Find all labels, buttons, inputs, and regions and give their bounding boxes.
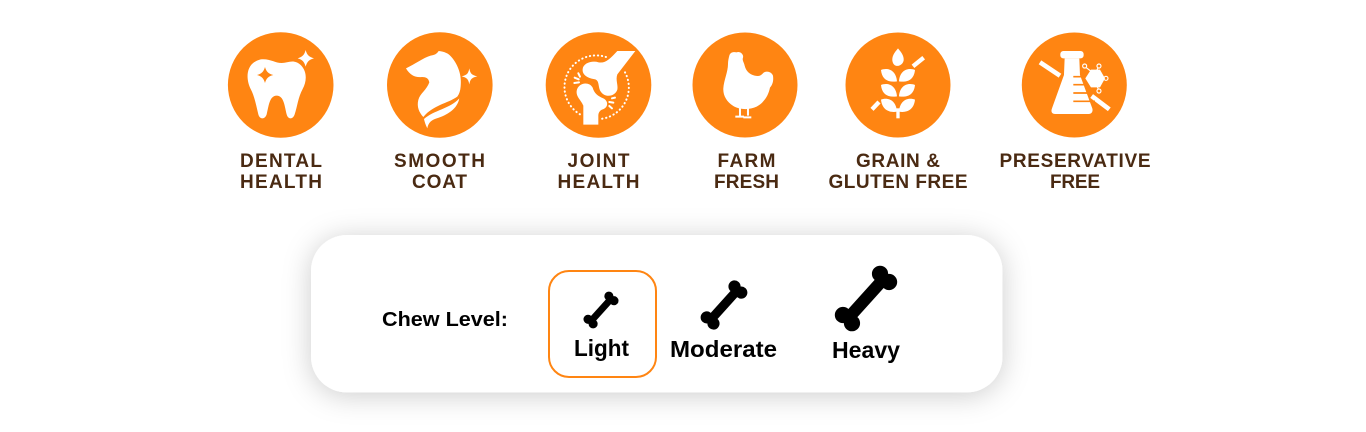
- benefit: dental health: [228, 32, 334, 193]
- label: moderate: Moderate: [670, 336, 777, 362]
- label: preservative free: [1000, 151, 1150, 193]
- label: heavy: Heavy: [832, 337, 900, 363]
- benefit: preservative free: [1000, 32, 1150, 193]
- label: farm fresh: FARM: [718, 151, 776, 172]
- selected option: light: [549, 271, 656, 377]
- option: moderate: [670, 278, 777, 362]
- label: smooth coat: SMOOTH: [394, 151, 485, 172]
- icon: heavy bone: [831, 262, 901, 335]
- benefit: smooth coat: [387, 32, 493, 193]
- label: joint health: [558, 151, 640, 193]
- icon: crossed-out wheat: [846, 32, 950, 138]
- label: smooth coat: COAT: [412, 172, 467, 193]
- heading: chew level: Chew Level:: [382, 308, 508, 331]
- icon: crossed-out flask: [1022, 32, 1127, 138]
- label: dental health: DENTAL: [240, 151, 322, 172]
- icon: chicken: [692, 32, 798, 138]
- benefit: grain and gluten free: [828, 32, 968, 193]
- label: grain and gluten free: [828, 151, 968, 193]
- label: preservative free: PRESERVATIVE: [1000, 151, 1150, 172]
- label: joint health: HEALTH: [558, 172, 640, 193]
- option: heavy: [831, 262, 901, 363]
- icon: dog with shiny coat: [387, 32, 493, 138]
- label: grain and gluten free: GLUTEN FREE: [828, 172, 968, 193]
- label: grain and gluten free: GRAIN &: [856, 151, 940, 172]
- benefit: joint health: [546, 32, 651, 193]
- label: joint health: JOINT: [568, 151, 630, 172]
- benefit: farm fresh: [692, 32, 798, 193]
- panel: chew level: [311, 235, 1002, 392]
- label: dental health: [240, 151, 322, 193]
- label: farm fresh: [714, 151, 779, 193]
- label: dental health: HEALTH: [240, 172, 322, 193]
- label: smooth coat: [394, 151, 485, 193]
- icon: knee joint: [546, 32, 651, 138]
- label: light: Light: [574, 335, 629, 361]
- label: preservative free: FREE: [1050, 172, 1100, 193]
- icon: moderate bone: [698, 278, 750, 332]
- icon: light bone: [582, 290, 620, 330]
- icon: tooth: [228, 32, 334, 138]
- label: farm fresh: FRESH: [714, 172, 779, 193]
